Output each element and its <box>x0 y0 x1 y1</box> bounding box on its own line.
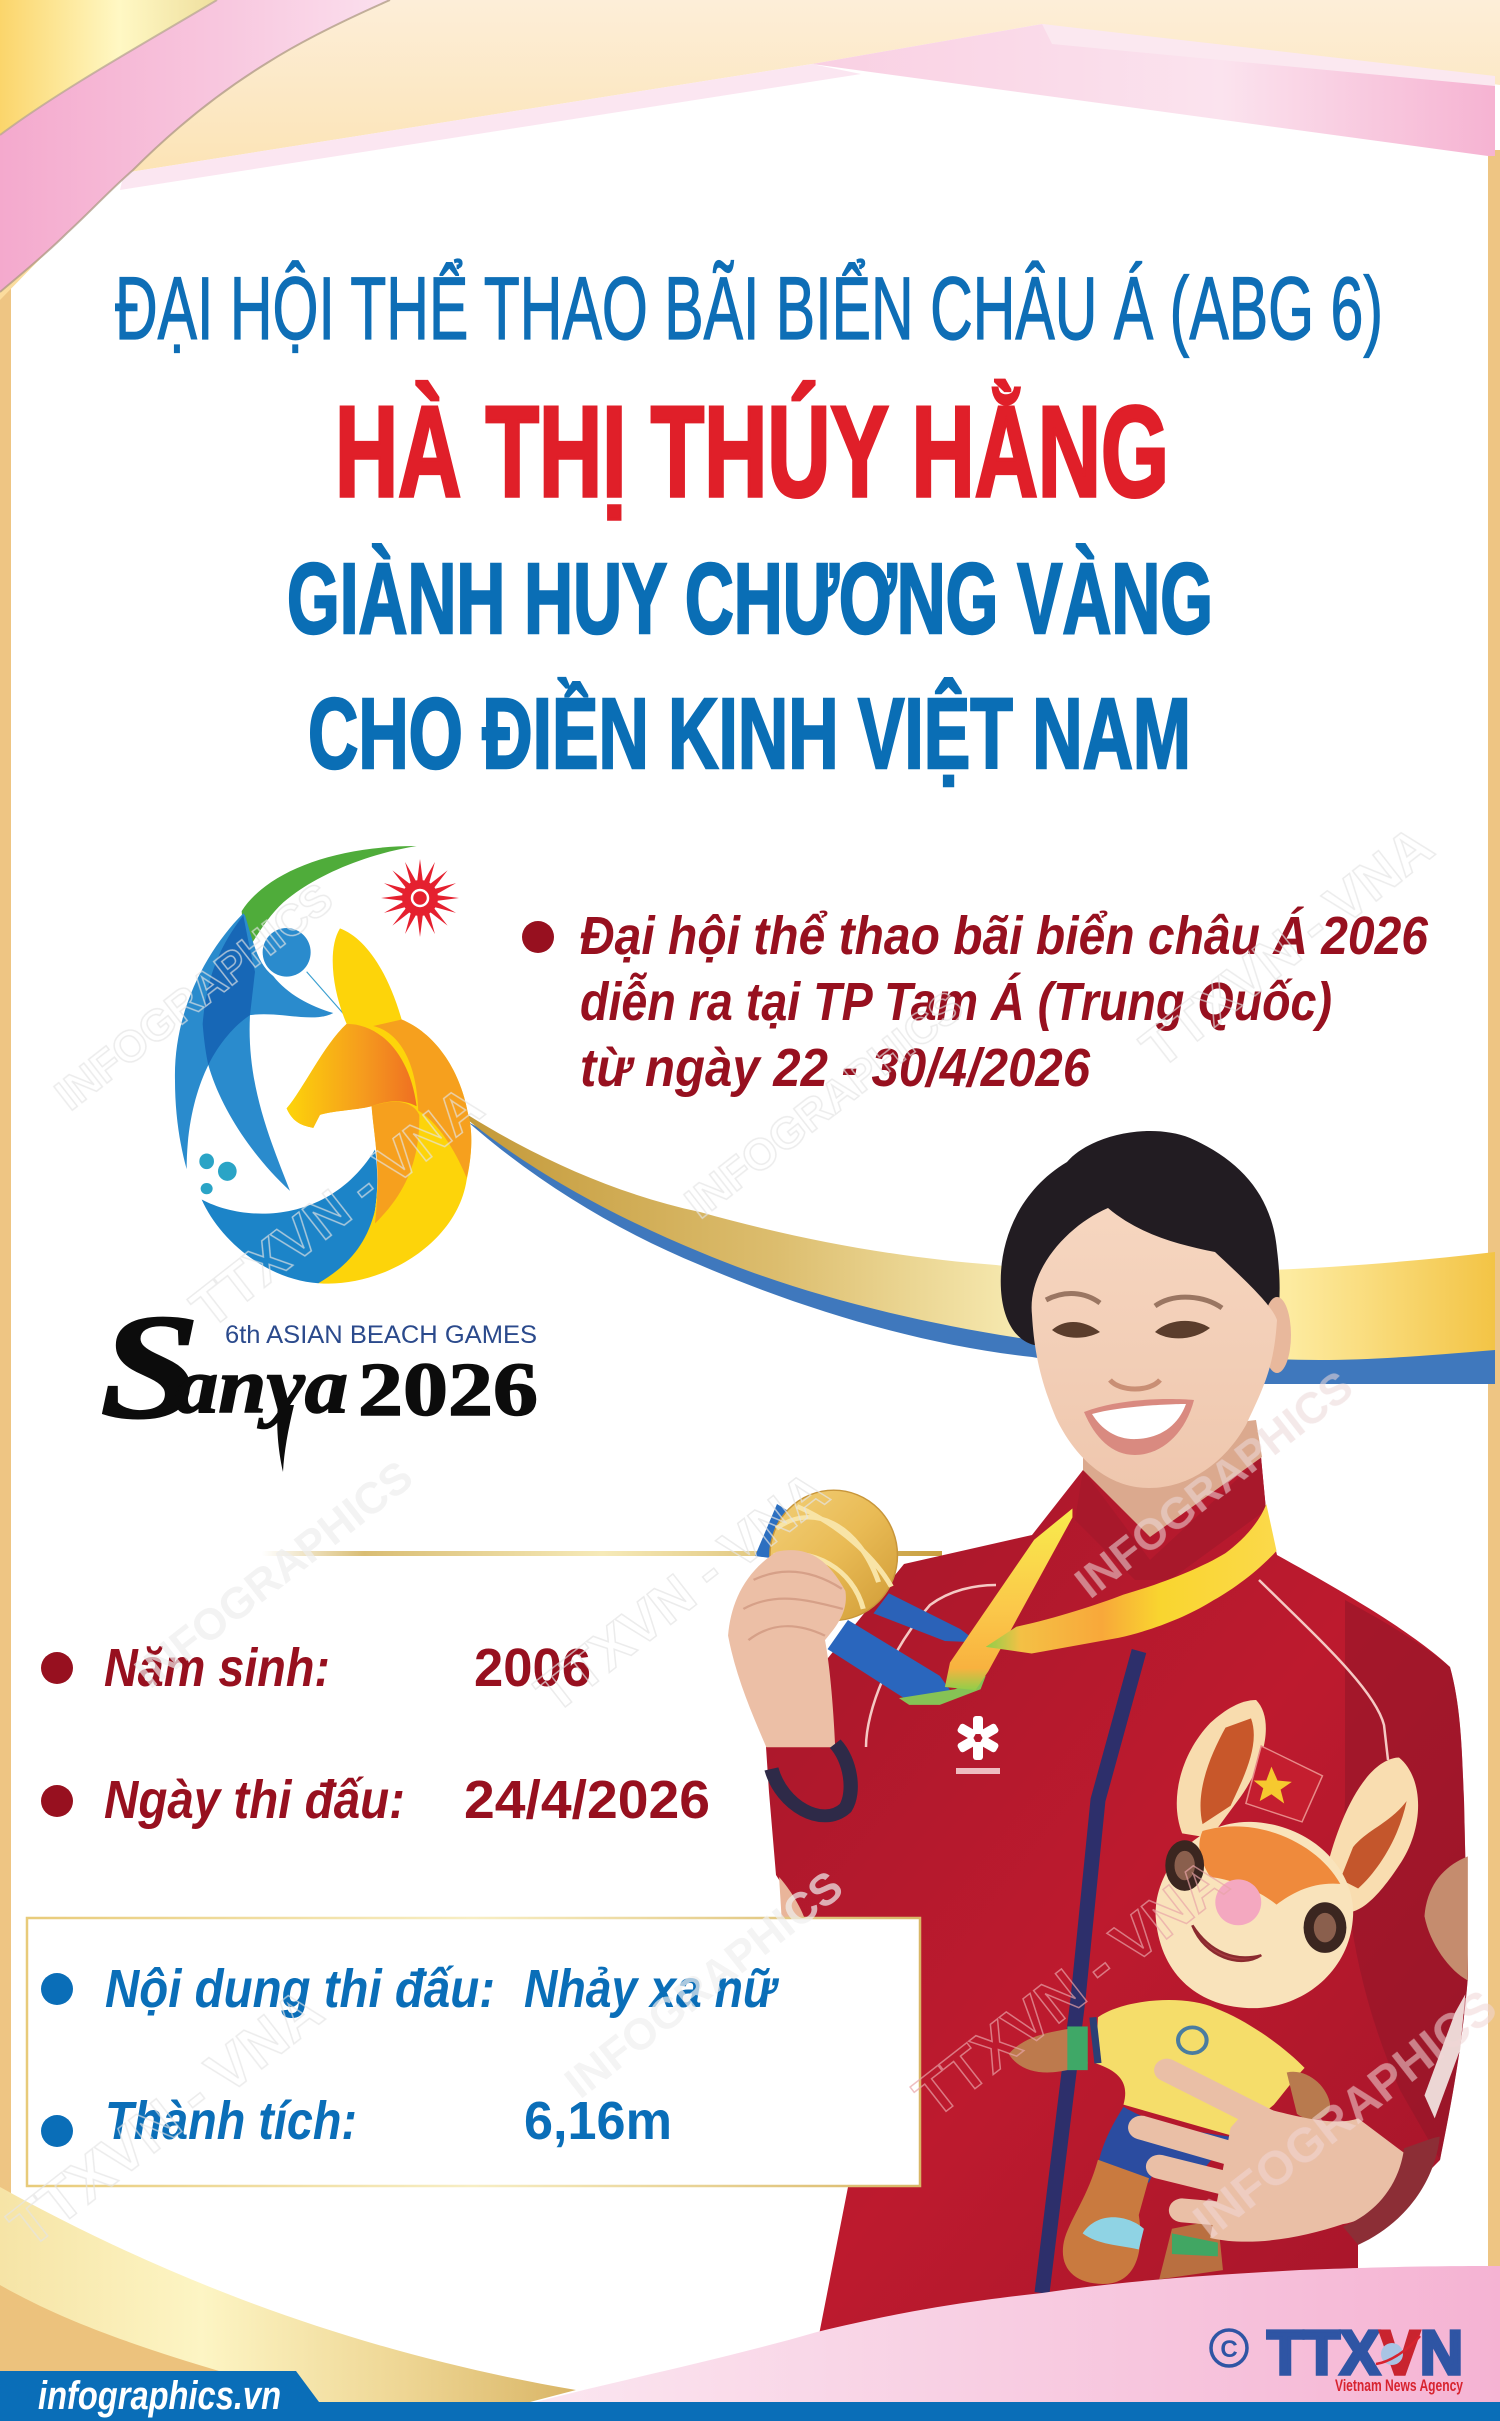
hand holding medal <box>728 1550 846 1747</box>
Sanya 2026 wordmark: S <box>100 1284 200 1450</box>
jacket cuff on left wrist <box>771 1744 851 1816</box>
TTXVN logo: C <box>1220 2336 1238 2363</box>
left ear <box>1177 1700 1266 1838</box>
lower blue strand <box>828 1620 953 1698</box>
eyes <box>1165 1840 1204 1891</box>
sleeve lettering patch <box>1424 1994 1465 2118</box>
yellow strap <box>945 1508 1072 1690</box>
Sanya 2026 wordmark: 6th ASIAN BEACH GAMES <box>225 1321 537 1349</box>
finger lines <box>743 1572 843 1640</box>
yellow and orange kangaroo form <box>287 928 471 1284</box>
row: birth year: 2006 <box>474 1638 591 1698</box>
event description: từ ngày 22 - 30/4/2026 <box>580 1038 1091 1098</box>
row: competition date <box>41 1770 710 1830</box>
event description: diễn ra tại TP Tam Á (Trung Quốc) <box>580 972 1332 1032</box>
white piping <box>1259 1580 1388 1760</box>
jacket <box>766 1457 1468 2345</box>
small blue ribbon behind medal <box>755 1504 790 1558</box>
flag patch <box>1246 1746 1322 1822</box>
watermarks: TTXVN - VNA <box>0 1976 335 2260</box>
mascot and lower details <box>771 1700 1468 2284</box>
pink nose <box>1215 1879 1261 1925</box>
green swoosh <box>242 846 417 954</box>
collar shadow <box>1075 1457 1266 1580</box>
eyes <box>1052 1321 1210 1338</box>
info box frame <box>27 1918 920 2186</box>
TTXVN logo: TTXVN <box>1267 2319 1463 2388</box>
Sanya 2026 wordmark <box>100 1284 538 1472</box>
watermarks: INFOGRAPHICS <box>126 1452 422 1698</box>
row: birth year: Năm sinh: <box>104 1638 330 1698</box>
row: event: Nội dung thi đấu: <box>105 1959 495 2019</box>
info rows: personal details <box>41 1638 710 1830</box>
orange head fur <box>1199 1826 1340 1905</box>
blue figure <box>175 913 333 1191</box>
neck <box>1083 1420 1262 1537</box>
shirt emblem <box>1178 2027 1207 2053</box>
row: event: Nhảy xa nữ <box>524 1959 780 2019</box>
jacket cuff <box>1343 2137 1440 2245</box>
neighbour's hand <box>1424 1856 1468 1980</box>
lips <box>1084 1399 1194 1455</box>
watermarks: TTXVN - VNA <box>179 1073 494 1339</box>
medal <box>770 1490 897 1621</box>
zipper <box>1042 1651 1139 2293</box>
watermarks: INFOGRAPHICS <box>1066 1362 1362 1608</box>
yellow shirt <box>1095 2000 1305 2137</box>
row: result <box>41 2091 672 2151</box>
bottom decorative band <box>0 2187 1500 2421</box>
nose <box>1110 1380 1160 1389</box>
jacket brand logo <box>956 1716 1000 1774</box>
info rows: event and result <box>41 1959 780 2151</box>
mascot right arm <box>1287 2072 1330 2120</box>
blue wave <box>202 1150 377 1283</box>
Sanya 2026 wordmark: anya <box>175 1342 348 1429</box>
ear <box>1263 1297 1291 1373</box>
icon: red sun emblem <box>381 859 459 937</box>
photo: athlete with medal and mascot <box>728 1131 1468 2345</box>
website tab: infographics.vn <box>38 2374 281 2418</box>
mouth <box>1192 1925 1261 1961</box>
watermarks: INFOGRAPHICS <box>46 874 342 1120</box>
watermarks: INFOGRAPHICS <box>556 1862 852 2108</box>
head <box>1156 1822 1353 2008</box>
blue medal strands, ribbon and medal <box>728 1490 1277 1747</box>
top decorative band <box>0 0 1500 300</box>
face <box>1032 1208 1277 1488</box>
holding hand <box>1141 2070 1404 2242</box>
row: competition date: 24/4/2026 <box>464 1770 710 1830</box>
bullet <box>522 921 554 953</box>
row: birth year <box>41 1638 591 1698</box>
watermarks: INFOGRAPHICS <box>1184 1980 1500 2249</box>
Sanya 2026 wordmark: 2026 <box>358 1348 538 1432</box>
row: result: 6,16m <box>524 2091 672 2151</box>
row: result: Thành tích: <box>105 2091 357 2151</box>
icon: Asian Beach Games logo <box>175 846 471 1284</box>
teeth <box>1092 1404 1186 1439</box>
mascot left arm <box>1009 2026 1088 2072</box>
row: event <box>41 1959 780 2019</box>
watermarks: TTXVN - VNA <box>902 1846 1240 2130</box>
green ribbon tail <box>899 1676 986 1705</box>
medal engraving <box>774 1506 891 1609</box>
shorts <box>1098 2107 1231 2183</box>
title <box>115 258 1383 790</box>
row: competition date: Ngày thi đấu: <box>104 1770 405 1830</box>
orange strap <box>986 1504 1277 1654</box>
right leg <box>1159 2220 1223 2279</box>
watermarks: TTXVN - VNA <box>1129 813 1444 1079</box>
eyebrows <box>1046 1294 1222 1308</box>
watermarks: TTXVN - VNA <box>524 1458 839 1724</box>
right ear <box>1328 1757 1418 1912</box>
gold and blue swoosh <box>468 1115 1495 1384</box>
event description <box>522 906 1429 1098</box>
watermarks <box>0 813 1500 2260</box>
upper blue strand <box>873 1593 978 1642</box>
hair <box>1001 1131 1280 1345</box>
darker right sleeve <box>1344 1600 1468 2160</box>
thin gold divider <box>262 1551 942 1556</box>
left leg and shoe <box>1063 2160 1149 2284</box>
watermarks: INFOGRAPHICS <box>676 982 972 1228</box>
skin under sleeve <box>779 1877 805 1918</box>
